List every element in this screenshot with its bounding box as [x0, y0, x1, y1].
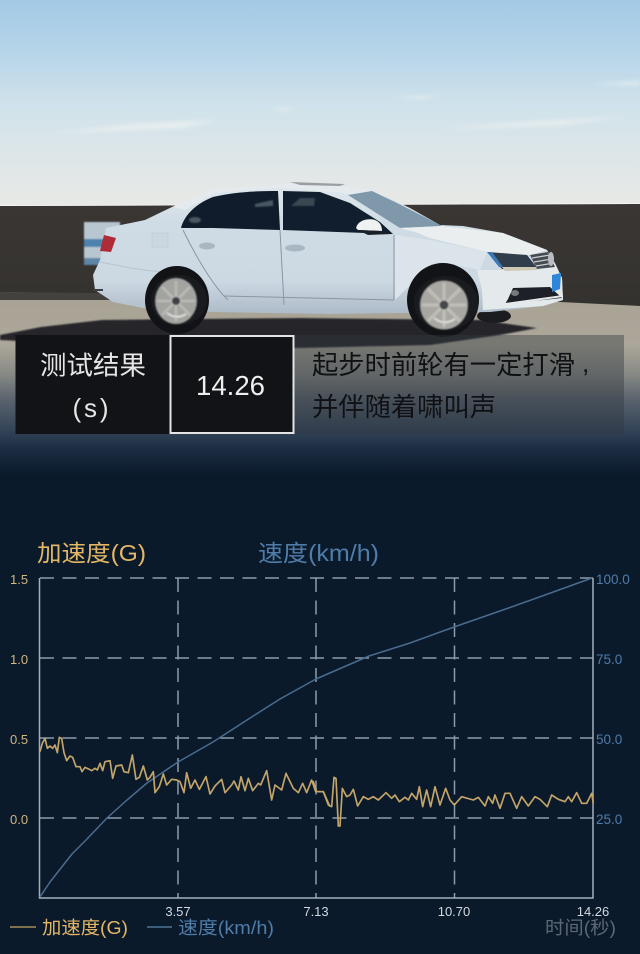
chart titles: 速度(km/h)	[258, 540, 379, 566]
lower bumper intake	[505, 287, 563, 304]
rear window reflections	[189, 200, 273, 223]
light roof edge	[172, 184, 398, 210]
headlight	[487, 252, 537, 271]
time axis labels: 10.70	[438, 904, 470, 919]
right axis labels	[596, 572, 630, 827]
time axis labels: 7.13	[303, 904, 329, 919]
road fading into navy	[0, 292, 640, 475]
left axis labels: 1.0	[10, 652, 28, 667]
tail light	[100, 235, 116, 252]
road strip beside wall	[0, 292, 140, 300]
test note	[312, 348, 589, 422]
acceleration curve, second half	[310, 777, 593, 826]
left axis labels: 0.0	[10, 812, 28, 827]
side mirror	[356, 219, 382, 231]
right axis labels: 100.0	[596, 572, 630, 587]
far front tyre	[477, 309, 511, 323]
axes	[40, 578, 593, 898]
acceleration curve, first half	[40, 737, 330, 807]
time axis labels: 14.26	[577, 904, 609, 919]
motion-blurred sign behind car	[84, 222, 120, 265]
legend: time axis name: 时间(秒)	[545, 918, 616, 938]
left axis labels	[10, 572, 28, 827]
front wheel rim	[420, 280, 468, 330]
hood	[400, 226, 547, 255]
label cell: 测试结果	[40, 350, 146, 380]
left axis labels: 1.5	[10, 572, 28, 587]
grid lines	[40, 578, 593, 898]
chart titles: 加速度(G)	[37, 540, 146, 566]
right axis labels: 75.0	[596, 652, 622, 667]
rear bumper notch	[93, 289, 103, 291]
test note: 并伴随着啸叫声	[312, 392, 496, 422]
time axis labels	[165, 904, 609, 919]
door handles	[199, 242, 305, 252]
fender highlight	[395, 235, 487, 300]
right axis labels: 50.0	[596, 732, 622, 747]
chart titles	[37, 540, 379, 566]
right axis labels: 25.0	[596, 812, 622, 827]
rear wheel arch	[145, 266, 209, 334]
car body	[93, 184, 563, 314]
car shadow	[0, 318, 537, 348]
legend	[10, 918, 616, 938]
wall top highlight	[0, 204, 640, 206]
sky with thin clouds	[0, 0, 640, 206]
rear side window	[181, 191, 280, 230]
front tyre	[414, 276, 478, 330]
grille	[530, 252, 555, 269]
front bumper	[477, 264, 563, 310]
photo: car on test track	[0, 0, 640, 475]
test note: 起步时前轮有一定打滑	[312, 350, 575, 380]
number plate	[552, 273, 561, 292]
result panel	[16, 335, 624, 434]
door and body lines	[100, 230, 394, 305]
legend: acceleration: 加速度(G)	[42, 918, 128, 938]
rear tyre	[151, 275, 207, 325]
front window reflection	[291, 198, 315, 206]
time axis labels: 3.57	[165, 904, 191, 919]
legend: acceleration	[10, 918, 128, 938]
legend: speed: 速度(km/h)	[178, 918, 274, 938]
windshield	[348, 191, 442, 228]
label cell	[16, 335, 170, 434]
result value box: 14.26	[196, 370, 265, 401]
fuel flap	[152, 233, 168, 247]
left axis labels: 0.5	[10, 732, 28, 747]
rear wheel rim	[155, 278, 197, 324]
car	[93, 182, 563, 337]
concrete wall	[0, 204, 640, 306]
line chart	[10, 572, 630, 919]
sunroof	[290, 182, 345, 186]
front wheel arch	[407, 263, 479, 337]
front side window	[283, 191, 393, 234]
legend: speed	[147, 918, 274, 938]
speed curve	[40, 578, 592, 897]
translucent note background	[16, 335, 624, 434]
result value box	[170, 336, 294, 433]
test note: ,	[582, 348, 589, 378]
label cell: (s)	[72, 393, 108, 423]
